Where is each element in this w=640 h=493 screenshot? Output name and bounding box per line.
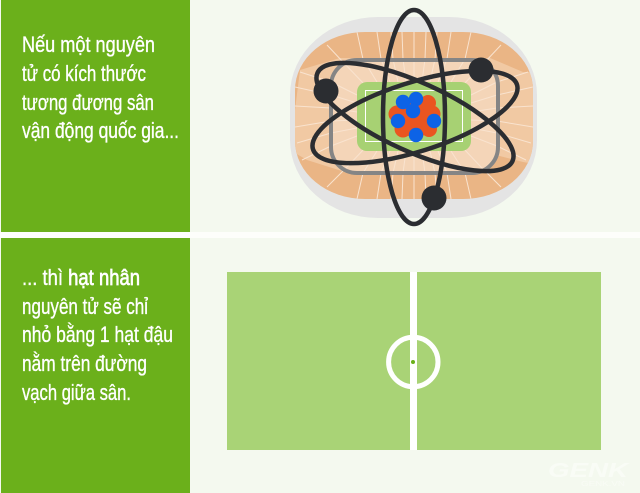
icon: atom orbits	[303, 10, 527, 224]
text: nucleus size statement: nằm trên đường	[22, 351, 147, 376]
text: atom size statement: tử có kích thước	[22, 61, 146, 86]
icon: atom nucleus	[388, 92, 441, 142]
watermark: GENK	[548, 460, 630, 482]
illustration: football pitch	[227, 272, 601, 450]
text: atom size statement: tương đương sân	[22, 90, 154, 115]
panel: bottom text panel	[1, 238, 190, 493]
text: atom size statement: vận động quốc gia...	[22, 118, 179, 143]
text: nucleus size statement	[22, 265, 173, 405]
panel: top text panel	[1, 0, 190, 232]
text: nucleus size statement: vạch giữa sân.	[22, 380, 131, 405]
text: atom size statement: Nếu một nguyên	[22, 32, 155, 57]
stadium pitch	[357, 82, 471, 151]
watermark: GENK.VN	[581, 481, 625, 488]
text: nucleus size statement: nguyên tử sẽ chỉ	[22, 294, 148, 319]
text: nucleus size statement: nhỏ bằng 1 hạt đậu	[22, 322, 173, 347]
stadium inner ring	[331, 60, 498, 173]
illustration: stadium	[290, 17, 540, 218]
icon: electrons	[314, 58, 494, 210]
text: nucleus size statement: ... thì hạt nhân	[22, 265, 140, 290]
icon: centre spot pea	[411, 360, 415, 364]
text: atom size statement	[22, 32, 179, 143]
watermark	[548, 460, 630, 488]
